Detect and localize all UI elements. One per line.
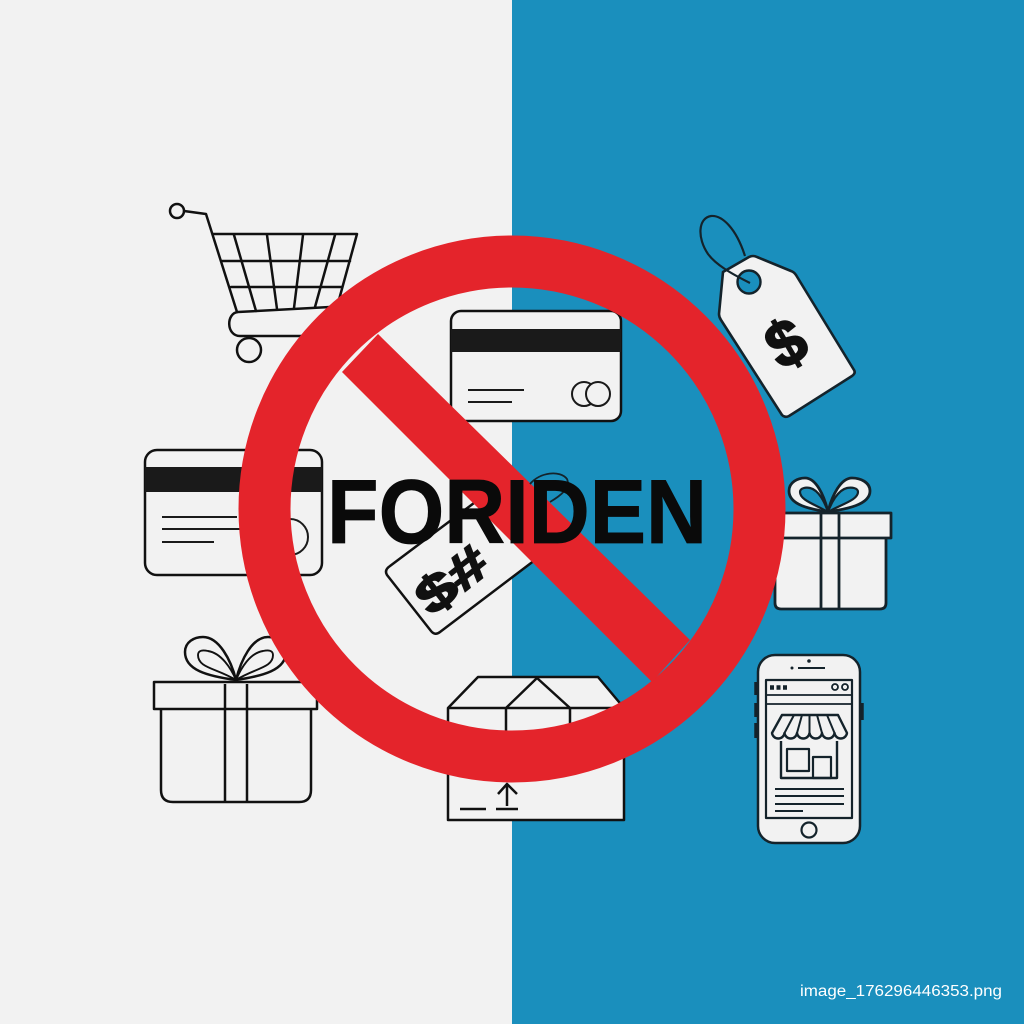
icon: shopping cart [170, 204, 357, 362]
icon: price tag top right [700, 216, 855, 417]
icon: gift box left [154, 637, 317, 802]
icon: price tag centre [386, 500, 535, 634]
left background panel [0, 0, 512, 1024]
icon: price tag centre: $# [404, 534, 500, 626]
right background panel [512, 0, 1024, 1024]
icon: smartphone with shop [756, 655, 862, 843]
icon: credit card left [145, 450, 322, 575]
icon: cardboard box [448, 677, 624, 820]
icon: price tag top right: $ [753, 303, 819, 383]
icon: centre tag string [530, 473, 568, 502]
prohibition sign [264, 262, 760, 756]
title: FORIDEN: FORIDEN [327, 462, 707, 563]
icon: gift box right [770, 478, 891, 609]
icon: credit card centre [451, 311, 621, 421]
filename caption: image_176296446353.png [800, 983, 1002, 1000]
